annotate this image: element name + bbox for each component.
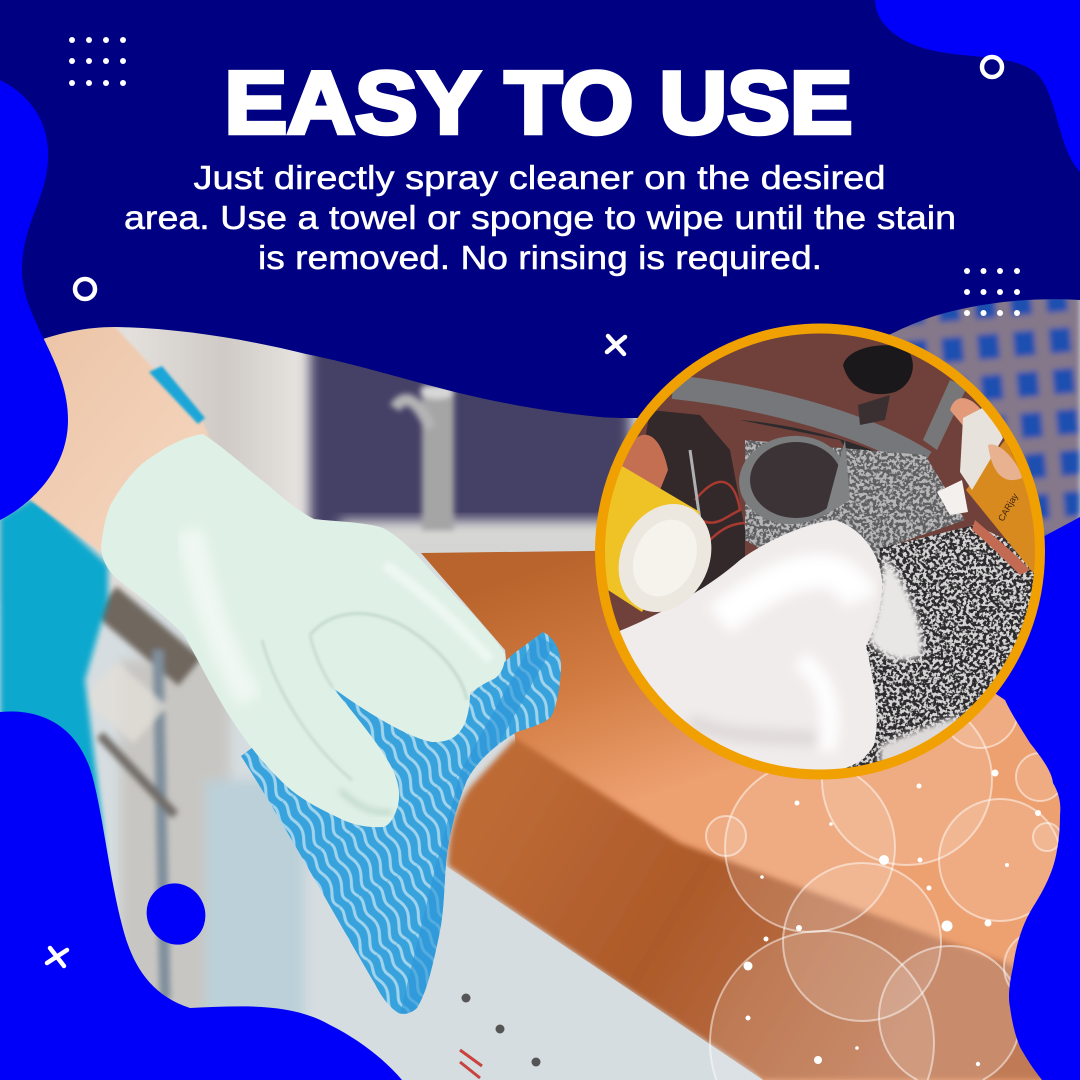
- spray can body: [966, 440, 1035, 574]
- foamed door panel: [745, 440, 965, 560]
- tile wall at right: [890, 299, 1080, 536]
- can label: CARjay: [996, 491, 1020, 523]
- finger on spray can: [950, 398, 980, 426]
- dot grid right: [964, 268, 1020, 316]
- glove: [101, 434, 505, 827]
- inset photo: foam cleaning car door: [595, 325, 1050, 780]
- dark under bar: [740, 420, 874, 451]
- description text: Just directly spray cleaner on the desired: [194, 159, 886, 196]
- teal shirt: [0, 498, 113, 866]
- side mirror: [739, 436, 850, 524]
- photo: background kitchen scene: [0, 295, 1080, 1080]
- cabinet panel: [446, 866, 763, 1080]
- dark machinery: [646, 410, 745, 594]
- ring left: [75, 279, 95, 299]
- black mirror head: [843, 345, 913, 394]
- description text: area. Use a towel or sponge to wipe until the stain: [124, 199, 956, 236]
- door pillar: [923, 380, 967, 450]
- wall and cabinet base: [0, 295, 1080, 1080]
- foam shading: [690, 571, 860, 750]
- blue cloth: [230, 620, 570, 1020]
- bright blue blob top left: [0, 80, 68, 520]
- speckled door body: [846, 525, 1034, 768]
- title: EASY TO USE: [224, 53, 852, 152]
- foam at bottom right: [880, 715, 960, 770]
- description text: is removed. No rinsing is required.: [258, 239, 822, 276]
- yellow brush handle: [600, 463, 700, 612]
- cross marker center: [607, 336, 625, 354]
- countertop surface: [421, 545, 1080, 1080]
- bright blue blob bottom left: [0, 711, 402, 1080]
- mirror stem: [858, 395, 890, 425]
- brick background: [608, 334, 1016, 631]
- bright blue blob right: [990, 517, 1080, 1080]
- cross marker bottom left: [47, 948, 67, 966]
- bright blue blob top right: [875, 0, 1080, 172]
- white foam mound: [620, 520, 882, 770]
- fingers on can: [988, 444, 1022, 480]
- bubbles: [706, 672, 1076, 1080]
- dot grid top left: [69, 37, 126, 86]
- countertop front edge: [448, 738, 1080, 1080]
- foam squirt: [937, 480, 968, 515]
- white brush disk: [618, 504, 712, 612]
- ring top right: [982, 57, 1002, 77]
- foam patch beside mound: [868, 556, 922, 660]
- teal sleeve accent: [149, 366, 205, 424]
- blue disk: [137, 874, 215, 954]
- faucet: [395, 385, 454, 530]
- door frame bar: [673, 387, 925, 462]
- spray nozzle: [960, 405, 1003, 490]
- orange ring: [600, 328, 1040, 774]
- description text: [124, 159, 956, 276]
- fingers holding brush: [620, 435, 668, 490]
- wires: [694, 480, 745, 541]
- cabinet buttons and label: [460, 994, 540, 1078]
- sparkles: [744, 770, 1041, 1066]
- forearm: [30, 327, 210, 552]
- navy header shape: [0, 0, 1080, 420]
- dark rail and cabinet legs: [100, 600, 190, 1000]
